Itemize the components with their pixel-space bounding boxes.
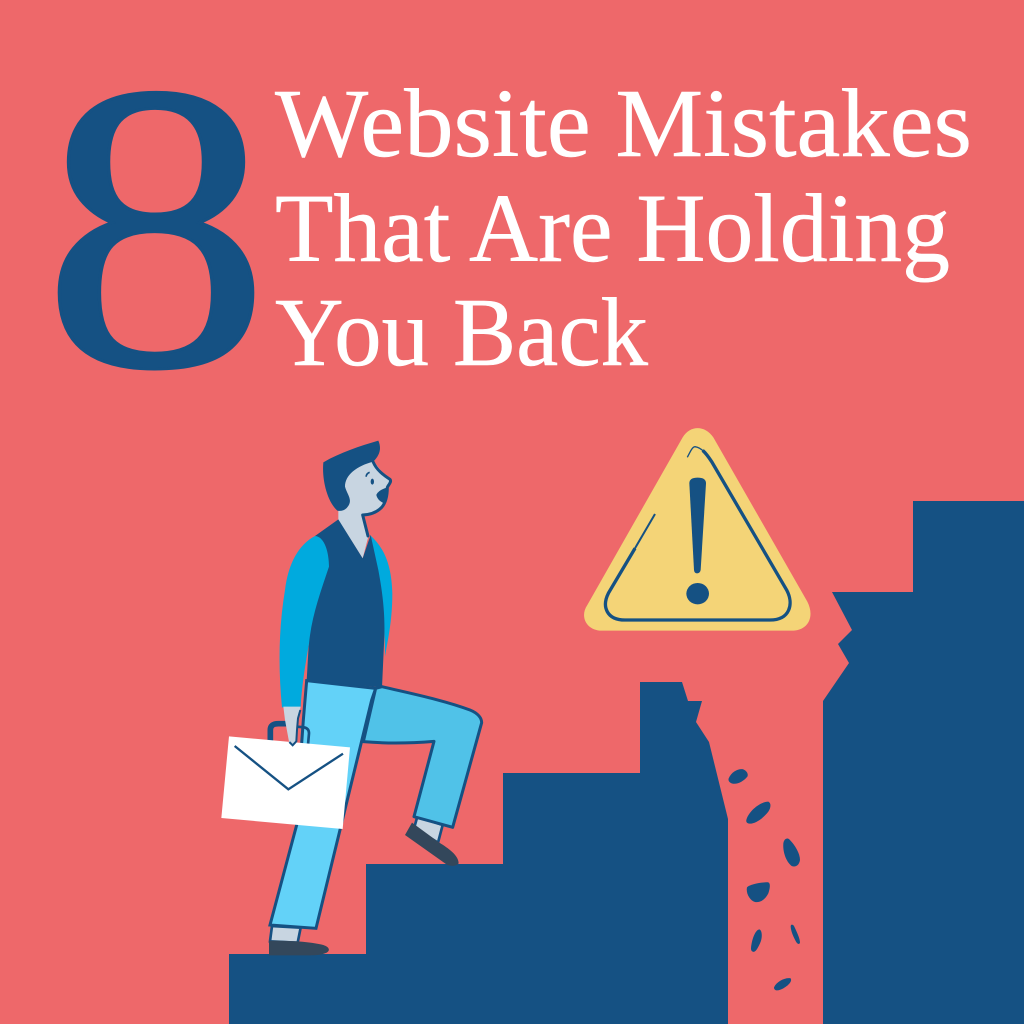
back leg xyxy=(270,681,376,928)
icon: warning triangle xyxy=(584,428,810,631)
falling debris xyxy=(728,769,800,990)
hand xyxy=(283,707,301,745)
ascending stairs, broken at the top xyxy=(229,682,728,1024)
figure: man climbing stairs xyxy=(221,441,482,955)
title line 1: Website Mistakes xyxy=(275,70,972,177)
briefcase and hand xyxy=(221,707,350,829)
torso and head xyxy=(280,441,392,707)
vest xyxy=(307,519,384,687)
stairs continuing after the gap xyxy=(823,501,1024,1024)
briefcase handle xyxy=(270,724,287,742)
left sleeve xyxy=(280,536,329,707)
title line 3: You Back xyxy=(275,279,648,386)
back shoe xyxy=(269,941,329,955)
numeral 8: 8 xyxy=(42,0,270,454)
title line 2: That Are Holding xyxy=(275,175,950,282)
back sock xyxy=(270,926,301,943)
front sock xyxy=(414,817,443,843)
mouth xyxy=(376,487,388,503)
front leg xyxy=(363,687,482,827)
eyebrow xyxy=(366,472,370,477)
front shoe xyxy=(405,823,459,866)
briefcase body xyxy=(221,736,350,829)
hand outline xyxy=(289,710,300,745)
face outline xyxy=(363,462,391,536)
briefcase envelope flap xyxy=(235,746,343,789)
eye xyxy=(371,479,374,485)
hair xyxy=(323,441,380,511)
neck and face xyxy=(338,457,391,558)
legs and feet xyxy=(269,681,482,955)
title xyxy=(275,70,972,386)
right sleeve xyxy=(370,535,392,657)
